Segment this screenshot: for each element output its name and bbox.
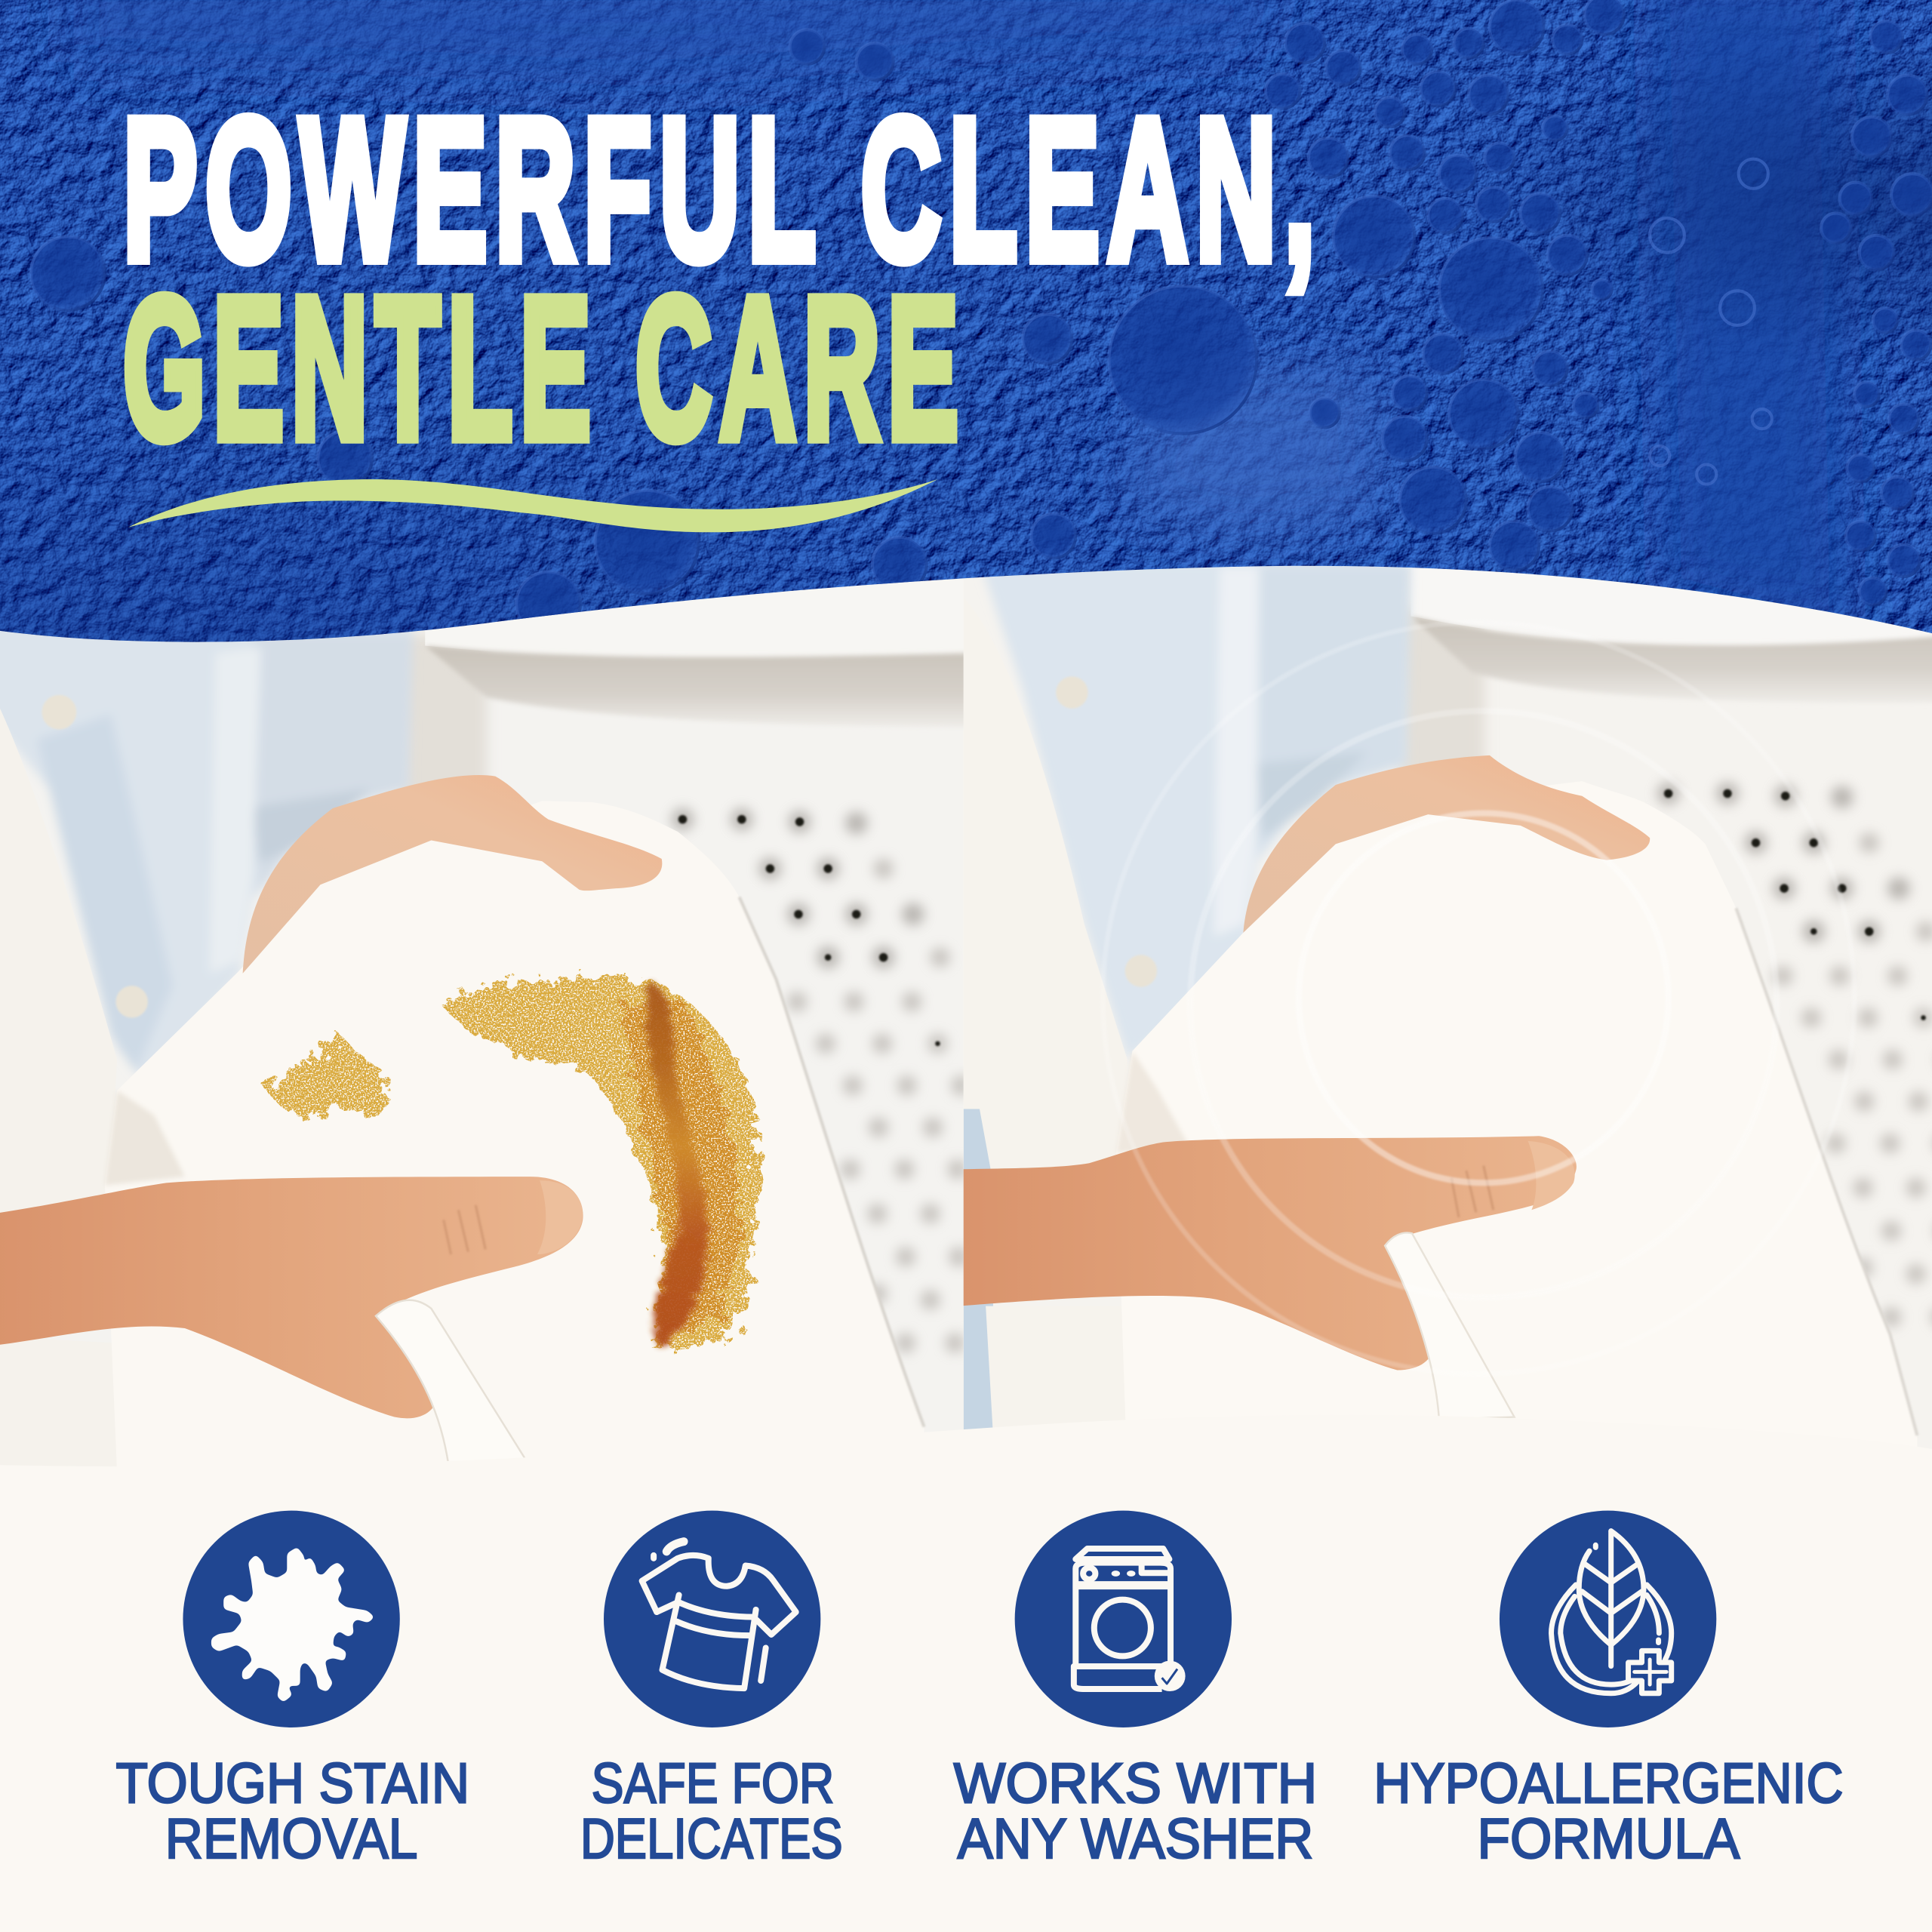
basket holes: [672, 808, 971, 1353]
green swoosh underline: [128, 479, 937, 532]
shirt buttons: [1056, 676, 1157, 987]
panel: blue soap bubble header: [0, 0, 1932, 666]
icon: splat: [183, 1511, 400, 1727]
laundry basket background: [1398, 561, 1932, 789]
panel: cream feature strip: [0, 1415, 1932, 1932]
label: [580, 1752, 843, 1870]
thumb details: [444, 1180, 583, 1254]
label: [1374, 1752, 1843, 1870]
white fabric: [107, 824, 925, 1428]
soap bubbles: [31, 0, 1932, 635]
label: ANY WASHER: [958, 1807, 1313, 1870]
label: TOUGH STAIN: [115, 1752, 469, 1815]
panel: after photo with clean shirt: [958, 542, 1932, 1491]
title: [123, 78, 1323, 481]
white cardigan: [964, 598, 1128, 1435]
label: FORMULA: [1478, 1807, 1740, 1870]
stain: small gold: [263, 1032, 384, 1118]
feature: tough stain removal: [115, 1511, 469, 1870]
icon: t-shirt: [604, 1511, 820, 1727]
smooth water patches: [74, 0, 1848, 641]
blue shirt strip: [964, 1109, 993, 1435]
sparkle rings: [1103, 622, 1854, 1374]
small bubble rings: [1650, 159, 1772, 485]
label: SAFE FOR: [592, 1752, 834, 1815]
label: DELICATES: [580, 1807, 843, 1870]
icon: leaf and drop: [1500, 1511, 1716, 1727]
blue shirt: [0, 622, 413, 1084]
thumb details: [1451, 1141, 1575, 1217]
lower hand: [0, 1177, 583, 1418]
fabric fold under hand: [1385, 1232, 1515, 1420]
lower hand: [958, 1136, 1577, 1371]
upper hand: [243, 775, 662, 974]
label: HYPOALLERGENIC: [1374, 1752, 1843, 1815]
white cardigan: [0, 709, 113, 1046]
panel: before photo with stained shirt: [0, 631, 964, 1461]
feature: works with any washer: [954, 1511, 1317, 1870]
white fabric: [1116, 781, 1917, 1478]
laundry basket background: [406, 632, 964, 786]
shirt buttons: [42, 695, 148, 1018]
label: [115, 1752, 469, 1870]
fabric fold under hand: [376, 1300, 530, 1472]
label: WORKS WITH: [954, 1752, 1317, 1815]
stain: large gold and rust: [441, 980, 757, 1349]
feature: safe for delicates: [580, 1511, 843, 1870]
blue shirt: [980, 561, 1411, 1060]
upper hand: [1243, 755, 1650, 933]
basket holes: [1657, 783, 1932, 1327]
label: REMOVAL: [165, 1807, 417, 1870]
label: [954, 1752, 1317, 1870]
icon: washing machine: [1015, 1511, 1232, 1727]
title line 2: GENTLE CARE: [123, 257, 966, 481]
feature: hypoallergenic formula: [1374, 1511, 1843, 1870]
